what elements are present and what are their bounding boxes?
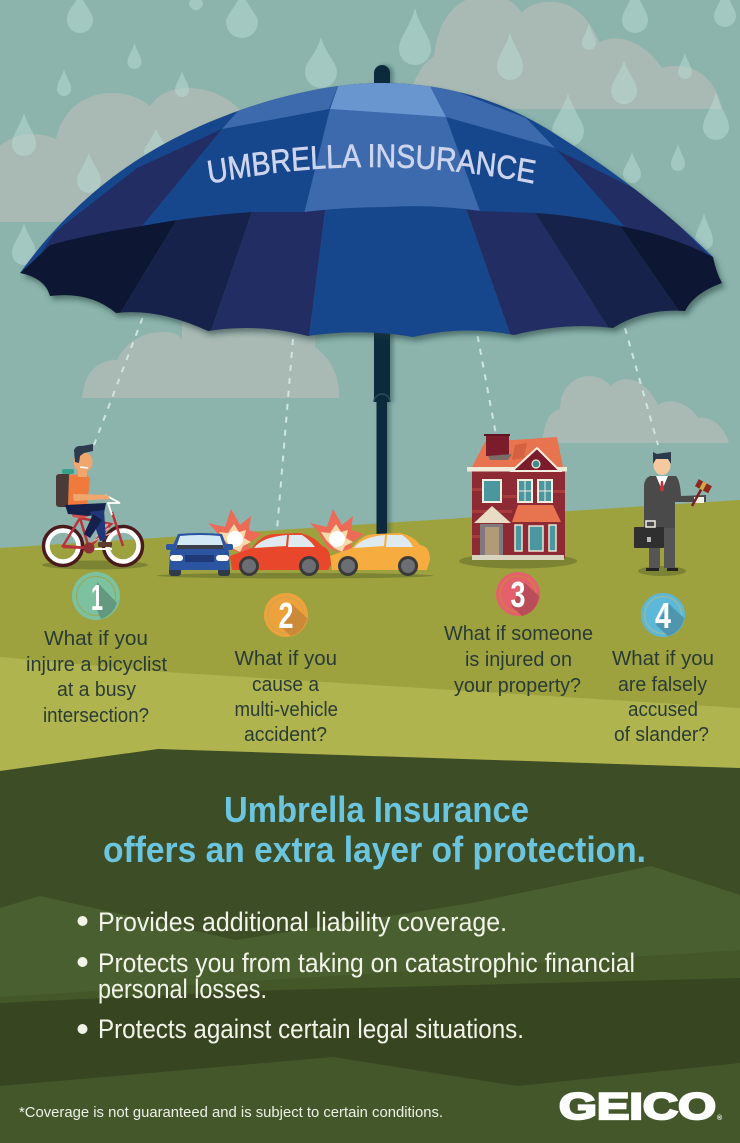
benefits list	[78, 907, 635, 1044]
question 3: What if someone	[444, 623, 593, 645]
question 3	[444, 623, 593, 697]
question 1: injure a bicyclist	[26, 654, 167, 676]
footnote: *Coverage is not guaranteed and is subject to certain conditions.	[19, 1104, 443, 1121]
GEICO logo: ®	[717, 1114, 723, 1122]
umbrella canopy	[20, 83, 727, 344]
shadow	[157, 573, 433, 578]
bicycle	[44, 495, 142, 566]
hill layer: base	[0, 749, 740, 1143]
upper windows	[483, 480, 552, 502]
cloud: lower right	[542, 376, 729, 443]
scene: bicyclist	[42, 444, 148, 570]
head	[653, 452, 671, 475]
rain drops	[12, 0, 736, 265]
question 4: accused	[628, 699, 698, 721]
lower windows	[515, 525, 556, 551]
bullet 2: personal losses.	[98, 974, 267, 1004]
question 2: accident?	[244, 724, 327, 746]
cloud: middle	[82, 322, 339, 398]
shadow	[638, 566, 686, 576]
car: blue	[166, 533, 233, 576]
question 2: What if you	[234, 648, 337, 670]
connector: house	[478, 336, 496, 432]
connector: man	[625, 328, 658, 445]
question 4: of slander?	[614, 724, 709, 746]
ground: light olive band	[0, 657, 740, 790]
question 4: What if you	[612, 648, 714, 670]
question 4: are falsely	[618, 674, 707, 696]
legs	[646, 526, 678, 571]
badge: 1	[72, 572, 120, 620]
eaves	[467, 467, 567, 472]
bullet 3: Protects against certain legal situations.	[98, 1014, 524, 1044]
explosion: left	[208, 509, 262, 556]
title on canopy: UMBRELLA INSURANCE	[208, 144, 536, 184]
lower dark green panel	[0, 749, 740, 1143]
hill layer: foreground	[0, 1057, 740, 1143]
question 1: What if you	[44, 628, 148, 650]
question 2: cause a	[252, 674, 320, 696]
bullet 1: Provides additional liability coverage.	[98, 907, 507, 937]
heading: offers an extra layer of protection.	[103, 829, 646, 870]
shadow	[459, 554, 577, 568]
storm clouds	[0, 0, 729, 443]
heading: Umbrella Insurance	[224, 789, 529, 830]
walls	[472, 470, 565, 558]
awning	[512, 505, 561, 522]
porch	[474, 506, 511, 555]
shirt and tie	[656, 476, 668, 492]
question 1	[26, 628, 167, 727]
question 3: is injured on	[465, 649, 572, 671]
car: yellow	[330, 533, 430, 576]
heading	[103, 789, 646, 870]
question 2: multi-vehicle	[234, 699, 338, 721]
badge: 2: 2	[278, 595, 294, 636]
GEICO logo: GEICO	[559, 1086, 716, 1127]
badge: 3: 3	[510, 574, 526, 615]
question 1: intersection?	[43, 705, 149, 727]
shadow	[42, 560, 148, 570]
briefcase	[634, 521, 664, 548]
ground: olive hill	[0, 500, 740, 780]
hill layer: lighter ridge	[0, 866, 740, 1010]
connector: cars	[277, 339, 293, 530]
hill layer: dark band	[0, 978, 740, 1100]
question 1: at a busy	[57, 679, 136, 701]
bullet 2: Protects you from taking on catastrophic financial	[98, 948, 635, 978]
chimney	[484, 434, 512, 460]
umbrella pole	[374, 65, 390, 534]
canopy underside panels	[0, 200, 740, 345]
scene: man with gavel	[634, 452, 712, 576]
badge: 4: 4	[655, 595, 671, 636]
bullet 2	[78, 948, 635, 1004]
suit jacket	[644, 476, 706, 530]
question 2	[234, 648, 338, 746]
sky background	[0, 0, 740, 560]
scene: car crash	[157, 509, 433, 578]
gable	[512, 448, 560, 471]
badge: 4	[641, 593, 685, 637]
explosion: right	[310, 509, 364, 556]
cloud: top right	[408, 0, 722, 109]
question 4	[612, 648, 714, 746]
cloud: left	[0, 88, 245, 222]
roof	[472, 437, 563, 467]
scene: house	[459, 434, 577, 568]
badge: 1: 1	[91, 577, 103, 618]
dashed connector lines	[94, 318, 658, 530]
hill layer: mid ridge	[0, 950, 740, 1010]
foundation	[472, 555, 564, 560]
canopy dome panels	[20, 83, 714, 273]
badge: 2	[264, 593, 308, 637]
badge: 3	[496, 572, 540, 616]
rider	[56, 444, 112, 547]
gavel	[692, 479, 712, 506]
car: red	[230, 533, 331, 576]
connector: bicyclist	[94, 318, 142, 445]
question 3: your property?	[454, 675, 581, 697]
